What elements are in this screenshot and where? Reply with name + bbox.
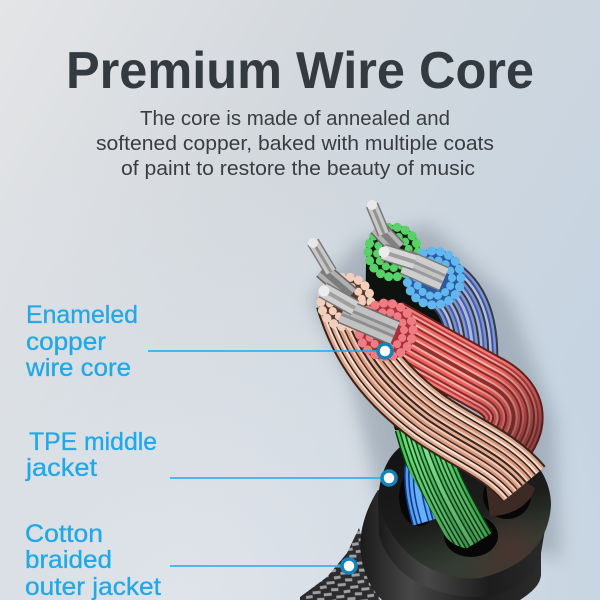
label: enameled copper wire core: copper bbox=[26, 328, 106, 356]
label: TPE middle jacket bbox=[25, 428, 157, 482]
leader line: enameled copper bbox=[148, 344, 392, 358]
cable holes bbox=[399, 468, 531, 557]
label: cotton braided outer jacket: Cotton bbox=[25, 520, 103, 548]
subtitle text: The core is made of annealed and bbox=[140, 108, 450, 130]
middle jacket cylinder wall bbox=[378, 500, 550, 597]
cable drop shadow bbox=[310, 225, 560, 560]
label: enameled copper wire core: Enameled bbox=[26, 301, 138, 329]
leader line: TPE jacket bbox=[170, 471, 396, 485]
red cable bbox=[388, 328, 514, 446]
title: Premium Wire Core bbox=[66, 42, 534, 100]
label: enameled copper wire core bbox=[25, 301, 138, 382]
gray inner strands: red core bbox=[318, 286, 395, 333]
label: TPE middle jacket: TPE middle bbox=[29, 428, 157, 456]
lower black sleeve bbox=[360, 490, 541, 600]
leader line: braided jacket bbox=[170, 559, 356, 573]
braided outer jacket bbox=[300, 528, 380, 600]
subtitle text bbox=[96, 108, 494, 180]
blue cable bbox=[436, 280, 472, 368]
copper ring bbox=[319, 275, 373, 329]
label: enameled copper wire core: wire core bbox=[25, 354, 131, 382]
label: cotton braided outer jacket: braided bbox=[25, 546, 112, 574]
green ring bbox=[366, 225, 420, 279]
label: TPE middle jacket: jacket bbox=[25, 454, 97, 482]
dark copper tail bbox=[482, 455, 535, 516]
TPE jacket top face bbox=[378, 436, 551, 578]
blue ring bbox=[405, 249, 463, 307]
subtitle text: of paint to restore the beauty of music bbox=[121, 158, 475, 180]
blue strand lower section bbox=[417, 462, 425, 522]
green strand lower section bbox=[418, 425, 472, 545]
red ring bbox=[356, 300, 416, 360]
black back cable under green ring bbox=[365, 262, 460, 430]
gray inner strands: green core bbox=[367, 200, 398, 249]
gray inner strands: copper core bbox=[308, 238, 351, 295]
gray inner strands: blue core bbox=[378, 246, 444, 279]
copper cable bbox=[343, 300, 524, 484]
label: cotton braided outer jacket bbox=[25, 520, 161, 600]
cable illustration bbox=[300, 200, 560, 600]
subtitle text: softened copper, baked with multiple coats bbox=[96, 133, 494, 155]
